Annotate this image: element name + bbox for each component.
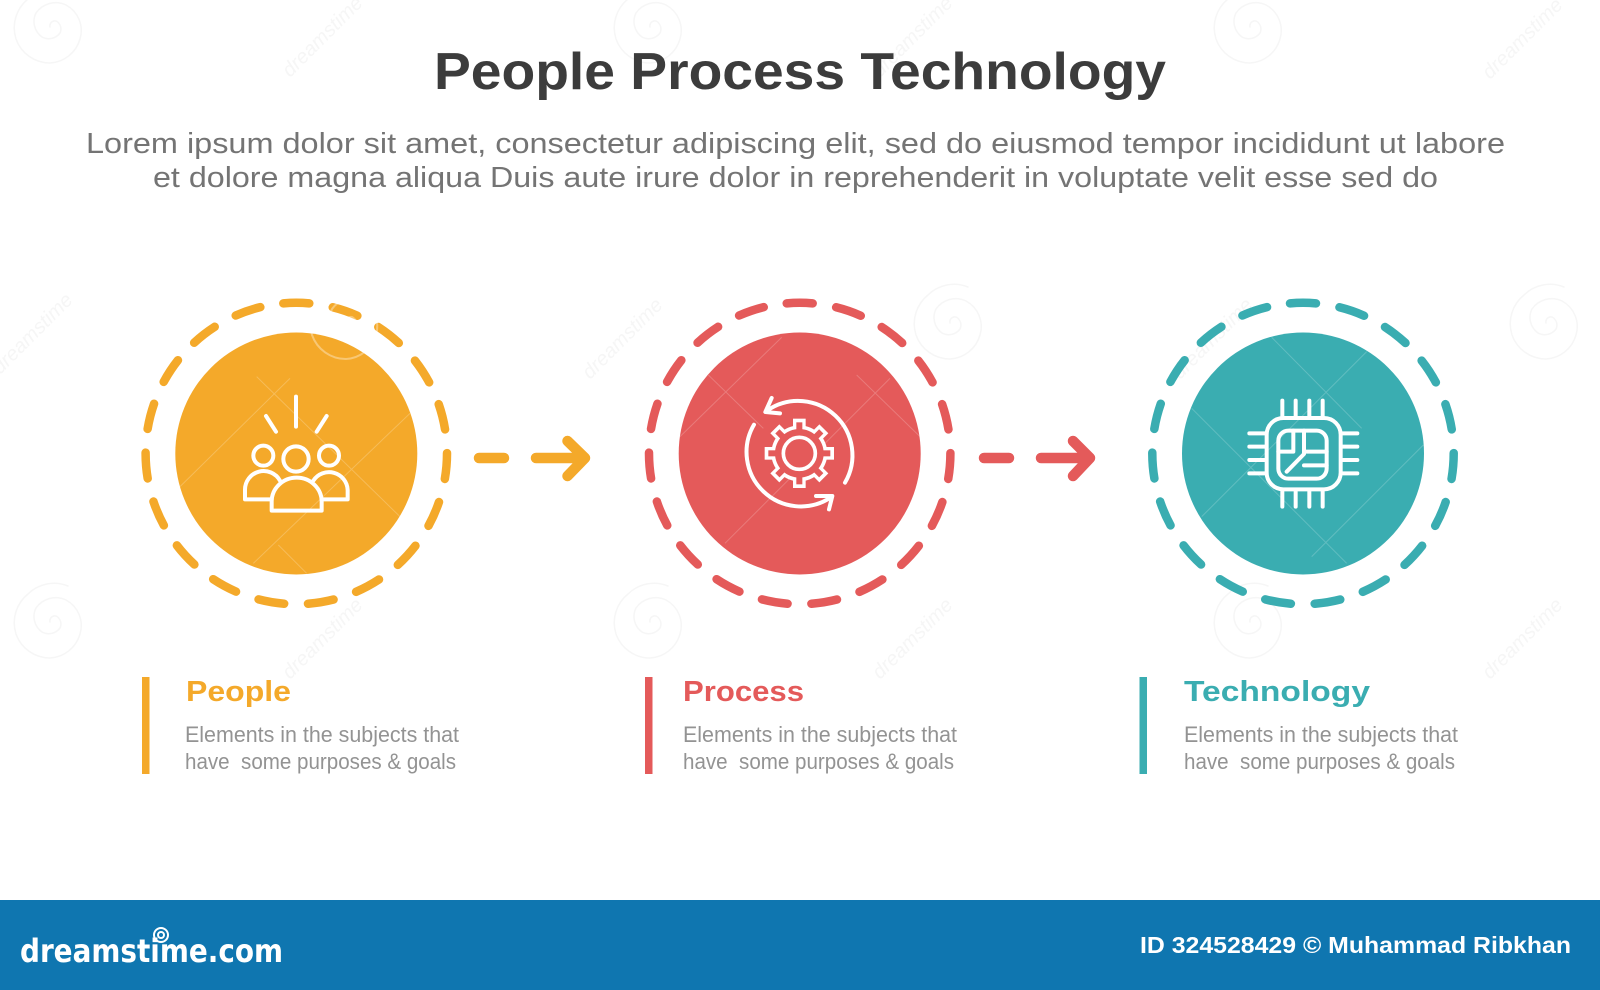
text: dreamstime [868,594,957,684]
label: technology [1140,676,1458,774]
text: dreamstime [278,594,367,684]
description: technology: Elements in the subjects that [1184,722,1458,747]
title: People Process Technology [434,43,1166,101]
heading: technology: Technology [1184,676,1370,708]
heading: process: Process [683,676,804,708]
arrow: people to process [479,441,585,476]
footer bar [0,900,1600,990]
description: process [683,722,957,774]
icon: gear with cycle arrows [747,398,852,509]
step: process circle [637,290,963,617]
dashed ring: technology [1140,290,1466,617]
accent bar: process [645,677,652,774]
description: people [185,722,459,774]
dashed ring: people [133,290,459,617]
description: technology [1184,722,1458,774]
intro text: et dolore magna aliqua Duis aute irure dolor in reprehenderit in voluptate velit esse sed do [153,162,1438,194]
description: process: have some purposes & goals [683,749,954,774]
text: dreamstime [578,294,667,384]
icon: logo spiral [154,928,168,942]
dashed ring: process [637,290,963,617]
footer logo: dreamstime.com [20,932,283,970]
text: dreamstime [1168,294,1257,384]
description: technology: have some purposes & goals [1184,749,1455,774]
label: process [645,676,957,774]
accent bar: people [142,677,150,774]
image credit: ID 324528429 © Muhammad Ribkhan [1140,932,1571,958]
icon: microchip [1249,401,1357,507]
step: technology circle [1140,290,1466,617]
disc: technology [1182,332,1424,574]
intro text [86,128,1505,194]
heading: people: People [186,676,291,708]
label: people [142,676,459,774]
intro text: Lorem ipsum dolor sit amet, consectetur adipiscing elit, sed do eiusmod tempor incididunt ut labore [86,128,1505,160]
arrow: process to technology [984,441,1090,476]
step: people circle [133,284,459,617]
disc: process [679,332,921,574]
text: dreamstime [1478,594,1567,684]
disc: people [175,332,417,574]
description: people: have some purposes & goals [185,749,456,774]
description: people: Elements in the subjects that [185,722,459,747]
icon: people group [245,397,348,511]
description: process: Elements in the subjects that [683,722,957,747]
accent bar: technology [1140,677,1147,774]
